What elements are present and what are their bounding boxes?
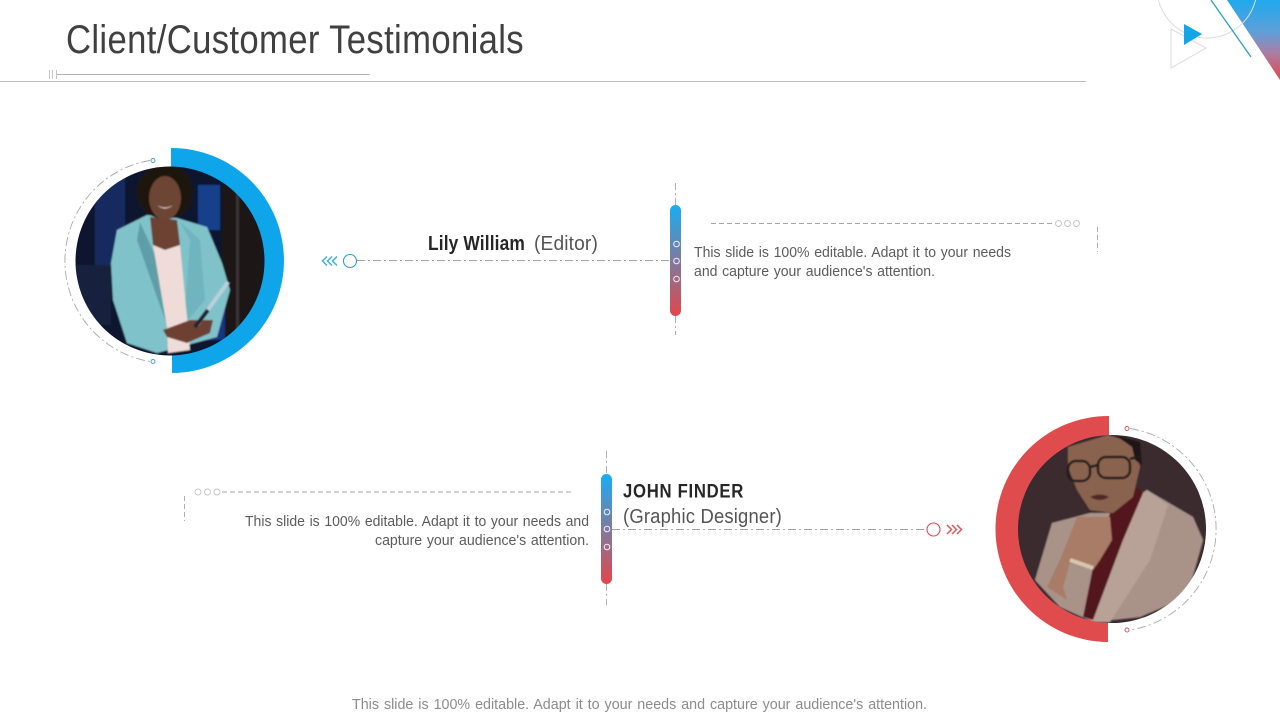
connector: Lily William xyxy=(322,254,670,268)
gradient bar 1 xyxy=(670,183,681,335)
name: John Finder xyxy=(623,482,782,528)
photo xyxy=(1015,430,1210,625)
gradient bar 2 xyxy=(601,451,612,605)
testimonial text 1: and capture your audience's attention. xyxy=(694,264,935,280)
blue crescent ring xyxy=(171,148,284,373)
testimonial text 1 xyxy=(694,245,1011,280)
portrait: Lily William xyxy=(65,148,284,373)
red crescent ring xyxy=(995,416,1109,642)
dashed frame 2 xyxy=(184,489,572,521)
dashed frame 1 xyxy=(711,220,1098,252)
name: Lily William: (Editor) xyxy=(534,233,598,255)
header rule xyxy=(0,70,1086,82)
node circle xyxy=(344,254,356,268)
name: Lily William: Lily William xyxy=(428,233,525,255)
title: Client/Customer Testimonials xyxy=(66,18,524,62)
name: John Finder: (Graphic Designer) xyxy=(623,506,782,528)
name: Lily William xyxy=(428,233,598,255)
chevrons xyxy=(947,525,962,534)
corner decoration xyxy=(1157,0,1280,80)
portrait: John Finder xyxy=(995,416,1216,642)
testimonial text 2: capture your audience's attention. xyxy=(375,533,589,549)
name: John Finder: JOHN FINDER xyxy=(623,482,744,502)
testimonial text 2: This slide is 100% editable. Adapt it to your needs and xyxy=(245,514,589,530)
photo xyxy=(76,166,264,356)
testimonial text 1: This slide is 100% editable. Adapt it to your needs xyxy=(694,245,1011,261)
chevrons xyxy=(322,256,337,266)
footer note: This slide is 100% editable. Adapt it to your needs and capture your audience's attention. xyxy=(352,697,927,713)
dashed orbit xyxy=(65,158,155,364)
testimonial text 2 xyxy=(245,514,589,549)
connector: John Finder xyxy=(612,523,962,536)
dashed orbit xyxy=(1125,426,1216,632)
node circle xyxy=(927,523,940,536)
